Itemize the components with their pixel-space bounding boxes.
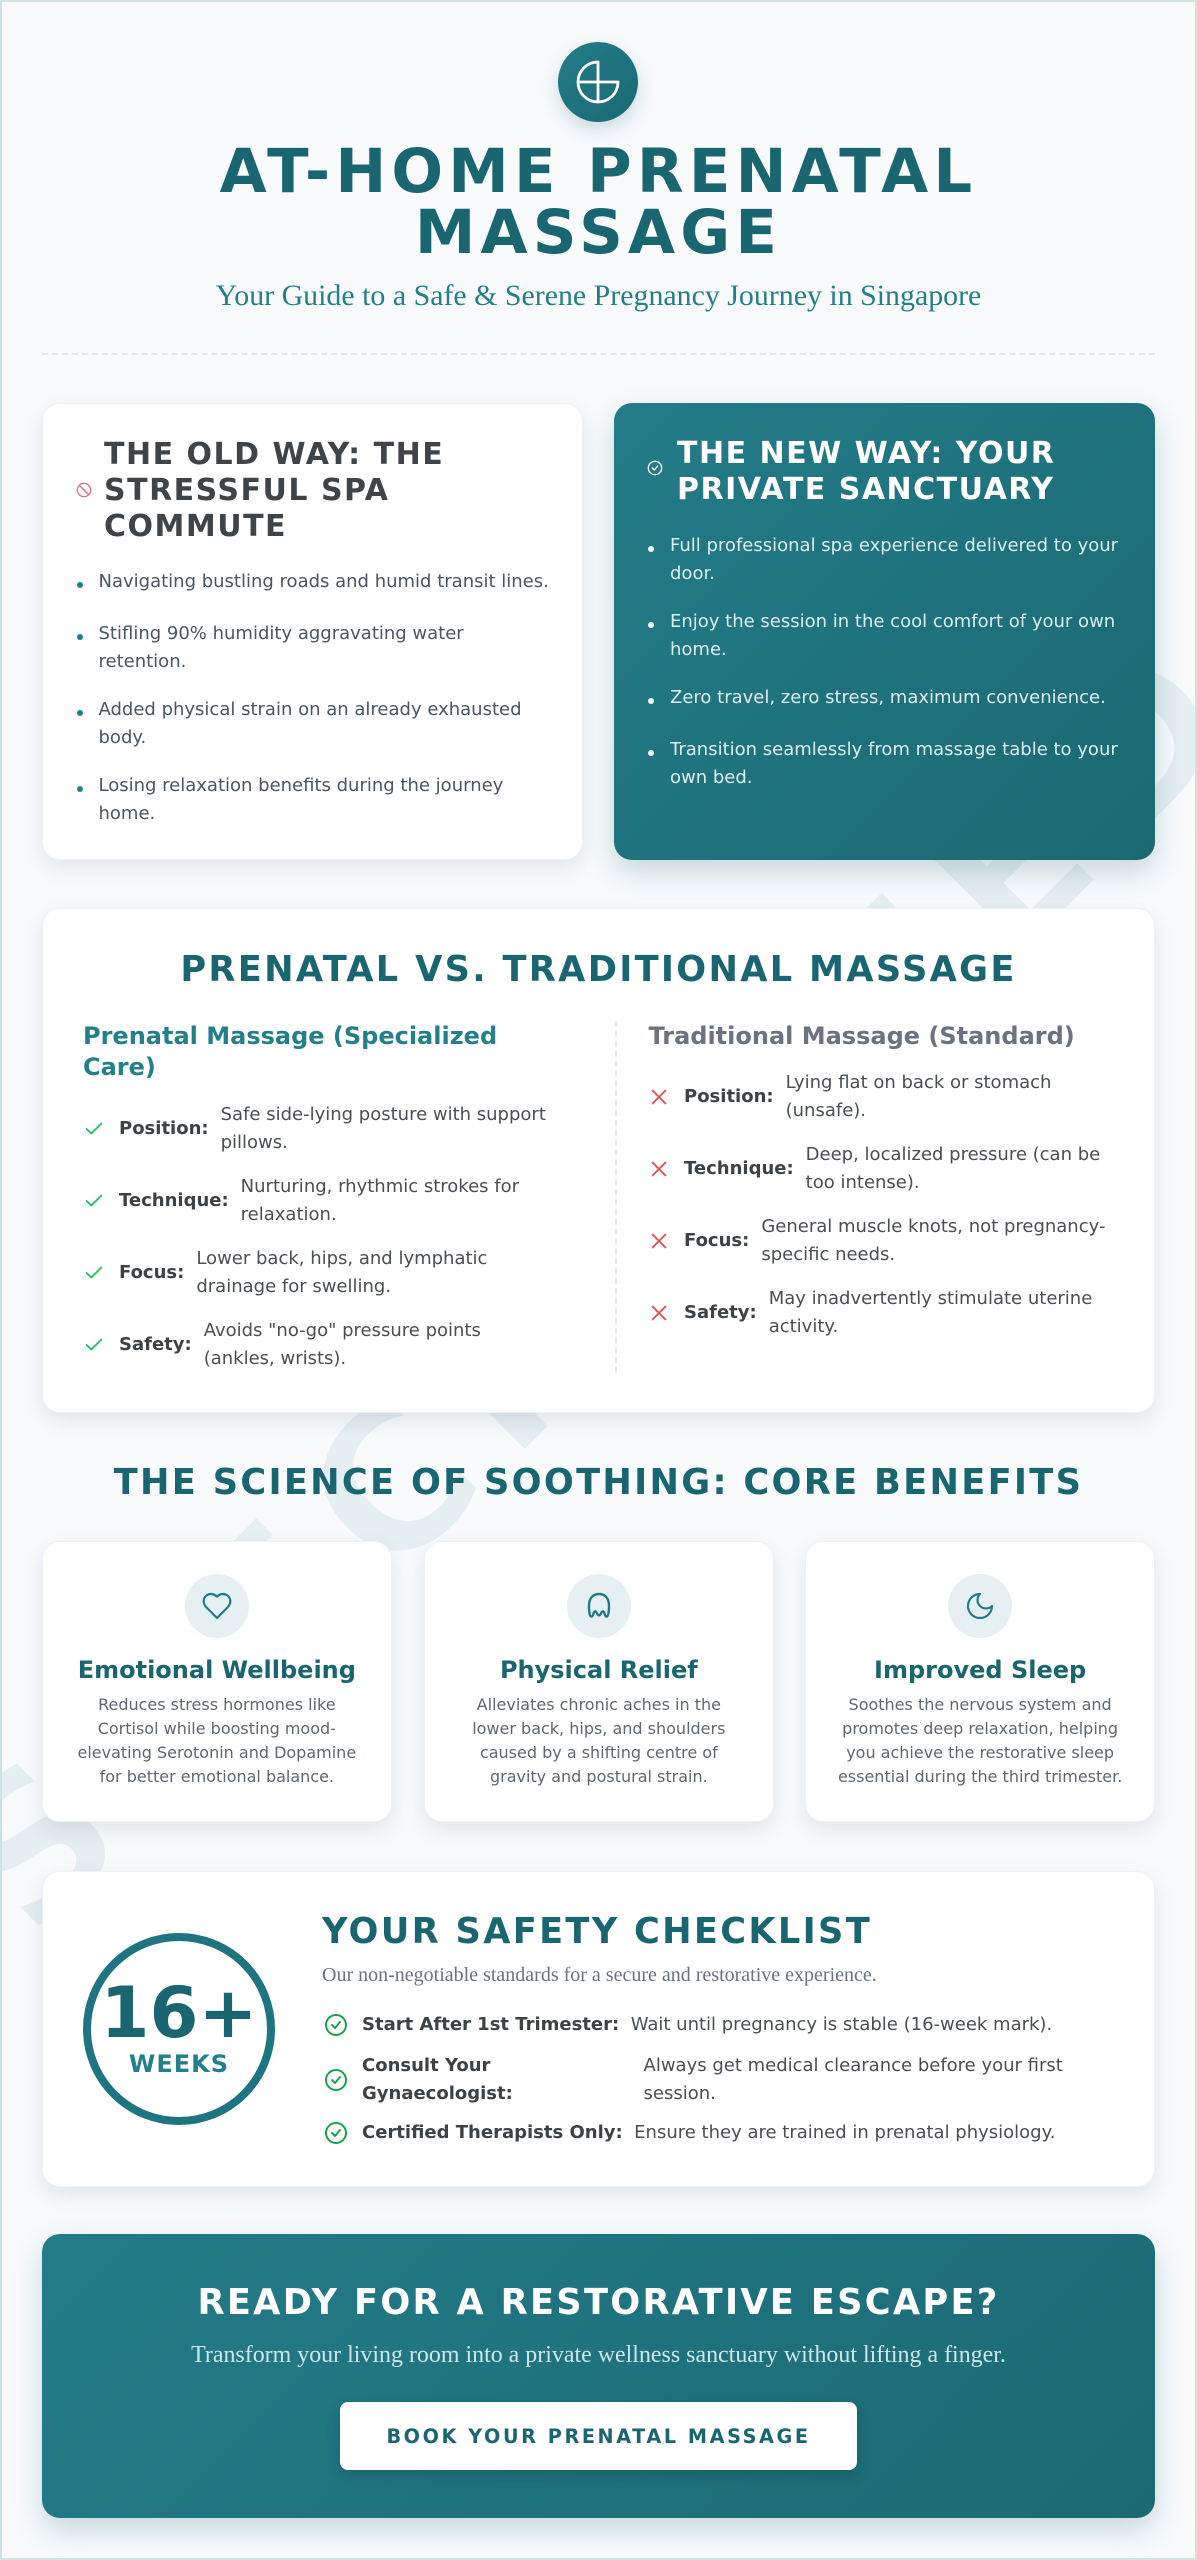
row: prenatal safety: Safety:: [119, 1334, 192, 1355]
list: old way points: home.: [98, 803, 155, 824]
row: prenatal position: Safe side-lying posture with support: [221, 1104, 546, 1125]
row: traditional technique: too intense).: [806, 1172, 920, 1193]
list: old way points: Added physical strain on an already exhausted: [98, 699, 522, 720]
row: traditional focus: General muscle knots, not pregnancy-: [761, 1216, 1105, 1237]
row: traditional position: (unsafe).: [786, 1100, 866, 1121]
row: prenatal focus: Focus:: [119, 1262, 184, 1283]
column heading: traditional: Traditional Massage (Standard): [648, 1022, 1075, 1050]
heading: old way: STRESSFUL SPA: [104, 473, 390, 508]
heading: new way: [677, 436, 1055, 507]
label: weeks: WEEKS: [129, 2050, 229, 2078]
icon: logo: [558, 42, 638, 122]
heading: old way: [104, 437, 444, 544]
panel: the old way: [42, 403, 583, 860]
heading: old way: COMMUTE: [104, 509, 287, 544]
text: improved sleep: promotes deep relaxation, helping: [842, 1719, 1118, 1738]
item: gynaecologist: Gynaecologist:: [362, 2083, 513, 2104]
heading: new way: PRIVATE SANCTUARY: [677, 472, 1054, 507]
item: first trimester: [325, 2014, 1052, 2036]
item: certified therapists: [325, 2122, 1055, 2144]
row: prenatal technique: Technique:: [119, 1190, 229, 1211]
text: emotional wellbeing: Reduces stress hormones like: [98, 1695, 336, 1714]
row: prenatal focus: [86, 1248, 487, 1297]
item: gynaecologist: Consult Your: [362, 2055, 490, 2076]
column heading: prenatal: [83, 1022, 497, 1081]
heading: safety checklist: YOUR SAFETY CHECKLIST: [322, 1911, 872, 1952]
heading: call to action: READY FOR A RESTORATIVE ESCAPE?: [197, 2282, 1000, 2323]
title: [220, 137, 977, 268]
subtitle: safety: Our non-negotiable standards for a secure and restorative experience.: [322, 1964, 877, 1986]
list: new way points: Full professional spa experience delivered to your: [670, 535, 1118, 556]
text: physical relief: lower back, hips, and shoulders: [472, 1719, 725, 1738]
row: traditional safety: Safety:: [684, 1302, 757, 1323]
text: emotional wellbeing: Cortisol while boosting mood-: [98, 1719, 336, 1738]
subtitle: Your Guide to a Safe & Serene Pregnancy Journey in Singapore: [216, 279, 981, 312]
list: old way points: retention.: [98, 651, 186, 672]
row: traditional focus: Focus:: [684, 1230, 749, 1251]
text: physical relief: Alleviates chronic aches in the: [477, 1695, 721, 1714]
heading: core benefits: THE SCIENCE OF SOOTHING: CORE BENEFITS: [114, 1462, 1083, 1503]
text: emotional wellbeing: for better emotional balance.: [100, 1767, 334, 1786]
text: physical relief: [472, 1695, 725, 1786]
heading: emotional wellbeing: Emotional Wellbeing: [78, 1656, 356, 1684]
item: gynaecologist: Always get medical clearance before your first: [644, 2055, 1063, 2076]
icon: tooth: [567, 1574, 631, 1638]
title: MASSAGE: [415, 198, 782, 268]
list: new way points: [648, 535, 1118, 788]
row: prenatal position: [86, 1104, 546, 1153]
row: prenatal technique: Nurturing, rhythmic strokes for: [241, 1176, 519, 1197]
text: improved sleep: you achieve the restorative sleep: [846, 1743, 1114, 1762]
text: improved sleep: Soothes the nervous system and: [849, 1695, 1112, 1714]
text: improved sleep: essential during the third trimester.: [838, 1767, 1122, 1786]
panel: the new way: [614, 403, 1155, 860]
title: AT-HOME PRENATAL: [220, 137, 977, 207]
text: physical relief: caused by a shifting centre of: [480, 1743, 718, 1762]
row: traditional technique: Deep, localized pressure (can be: [806, 1144, 1100, 1165]
divider: [42, 353, 1155, 355]
item: gynaecologist: [325, 2055, 1063, 2104]
panel: safety checklist: [42, 1871, 1155, 2187]
text: call to action: Transform your living room into a private wellness sanctuary without lifting a finger.: [191, 2342, 1006, 2368]
row: prenatal safety: [86, 1320, 481, 1369]
list: new way points: Zero travel, zero stress, maximum convenience.: [670, 687, 1106, 708]
row: traditional position: Position:: [684, 1086, 774, 1107]
text: emotional wellbeing: elevating Serotonin and Dopamine: [77, 1743, 356, 1762]
row: traditional position: [652, 1072, 1051, 1121]
list: new way points: door.: [670, 563, 715, 584]
list: new way points: Enjoy the session in the cool comfort of your own: [670, 611, 1115, 632]
item: certified therapists: Ensure they are trained in prenatal physiology.: [634, 2122, 1055, 2143]
list: old way points: Stifling 90% humidity aggravating water: [98, 623, 464, 644]
row: prenatal safety: (ankles, wrists).: [204, 1348, 346, 1369]
list: old way points: Losing relaxation benefits during the journey: [98, 775, 503, 796]
row: prenatal position: pillows.: [221, 1132, 288, 1153]
heading: improved sleep: Improved Sleep: [874, 1656, 1086, 1684]
column heading: prenatal: Prenatal Massage (Specialized: [83, 1022, 497, 1050]
row: traditional position: Lying flat on back or stomach: [786, 1072, 1051, 1093]
row: prenatal focus: Lower back, hips, and lymphatic: [196, 1248, 487, 1269]
row: prenatal safety: Avoids "no-go" pressure points: [204, 1320, 481, 1341]
heading: new way: THE NEW WAY: YOUR: [677, 436, 1055, 471]
list: new way points: own bed.: [670, 767, 753, 788]
row: traditional technique: [652, 1144, 1100, 1193]
row: traditional safety: May inadvertently stimulate uterine: [769, 1288, 1092, 1309]
heading: old way: THE OLD WAY: THE: [104, 437, 444, 472]
column heading: prenatal: Care): [83, 1053, 156, 1081]
button: book: BOOK YOUR PRENATAL MASSAGE: [386, 2425, 811, 2448]
text: physical relief: gravity and postural strain.: [490, 1767, 708, 1786]
text: improved sleep: [838, 1695, 1122, 1786]
row: traditional focus: specific needs.: [761, 1244, 895, 1265]
list: old way points: [77, 571, 549, 824]
text: emotional wellbeing: [77, 1695, 356, 1786]
number: 16+: 16+: [101, 1972, 257, 2054]
heading: comparison: PRENATAL VS. TRADITIONAL MASSAGE: [180, 949, 1017, 990]
row: prenatal technique: [86, 1176, 519, 1225]
list: new way points: Transition seamlessly from massage table to your: [670, 739, 1118, 760]
panel: call to action: [42, 2234, 1155, 2518]
item: gynaecologist: session.: [644, 2083, 716, 2104]
row: prenatal focus: drainage for swelling.: [196, 1276, 391, 1297]
panel: emotional wellbeing: [42, 1541, 392, 1822]
row: traditional safety: activity.: [769, 1316, 838, 1337]
row: prenatal position: Position:: [119, 1118, 209, 1139]
heading: physical relief: Physical Relief: [500, 1656, 698, 1684]
list: old way points: Navigating bustling roads and humid transit lines.: [98, 571, 549, 592]
panel: improved sleep: [805, 1541, 1155, 1822]
row: prenatal technique: relaxation.: [241, 1204, 337, 1225]
item: certified therapists: Certified Therapists Only:: [362, 2122, 623, 2143]
icon: moon: [948, 1574, 1012, 1638]
row: traditional focus: [652, 1216, 1105, 1265]
icon: circle check: [648, 460, 662, 476]
item: first trimester: Start After 1st Trimester:: [362, 2014, 619, 2035]
icon: heart: [185, 1574, 249, 1638]
row: traditional technique: Technique:: [684, 1158, 794, 1179]
button: book: [340, 2402, 857, 2470]
item: first trimester: Wait until pregnancy is stable (16-week mark).: [631, 2014, 1052, 2035]
badge: 16+ weeks: [83, 1933, 275, 2125]
row: traditional safety: [652, 1288, 1092, 1337]
list: new way points: home.: [670, 639, 727, 660]
icon: ban: [76, 482, 92, 498]
panel: physical relief: [424, 1541, 774, 1822]
list: old way points: body.: [98, 727, 146, 748]
